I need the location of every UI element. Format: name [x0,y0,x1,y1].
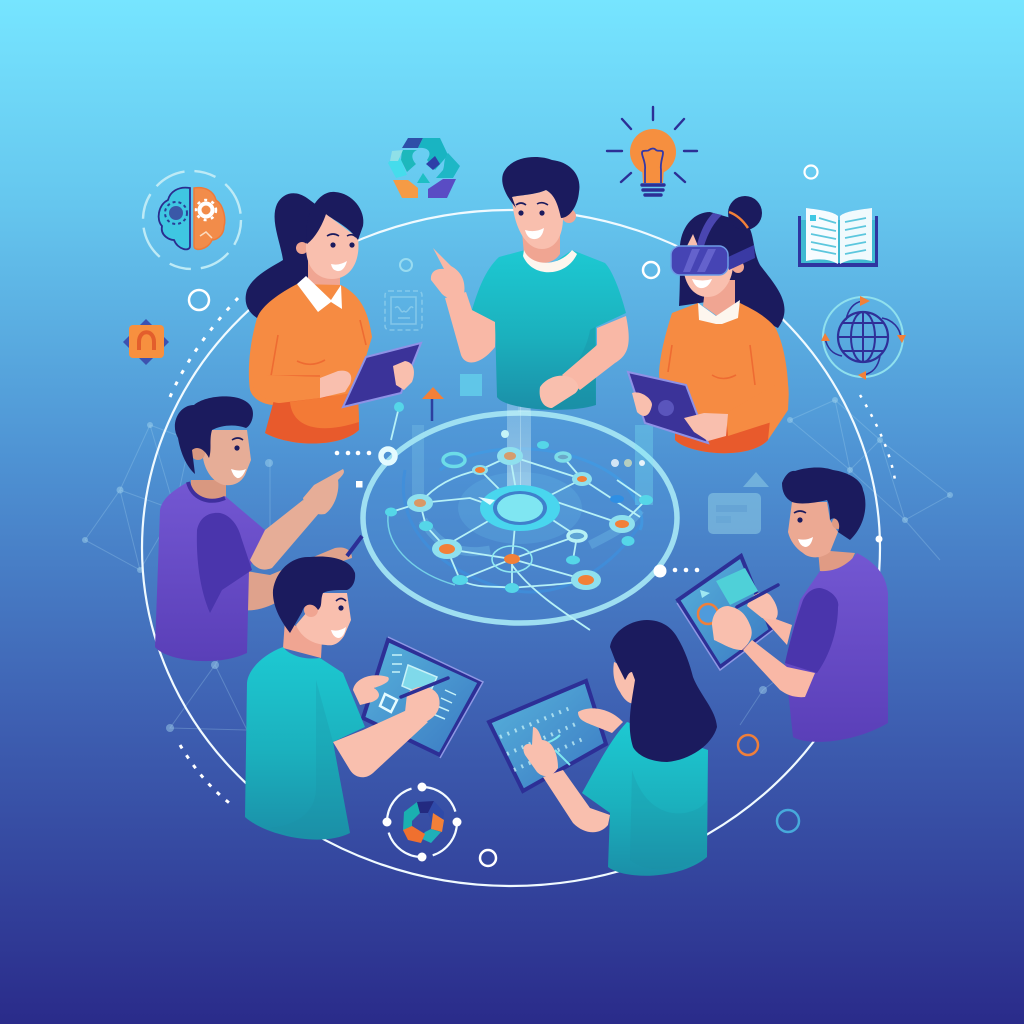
tablet [677,556,773,670]
tablet [489,681,606,791]
faint floating icons [385,259,769,534]
large orbit ring [142,210,895,886]
icon: lightbulb [607,107,697,195]
network links [391,407,646,630]
connector dots [335,449,699,578]
light beams [507,362,531,503]
central hub [478,485,560,531]
faint network right [740,397,953,725]
hologram nodes [385,402,653,593]
person: man pointing top centre [431,157,629,410]
tablet [363,637,483,758]
person: man with tablet bottom left [245,556,483,840]
icon: recycle hexagon [388,138,460,198]
faint network left [82,422,273,732]
hologram table [363,362,677,630]
small rings [189,166,818,866]
up arrow [422,387,444,421]
person: man with tablet right [677,468,888,742]
icon: orange diamond [123,319,169,365]
person: man pointing left [155,396,362,661]
icon: open book [798,208,878,267]
icon: cycle ring [382,782,462,862]
person: woman with tablet top left [246,192,421,444]
icon: globe [821,296,906,380]
icon: brain [143,171,241,269]
person: woman from behind with tablet [489,620,717,876]
person: woman with VR headset [628,196,789,453]
VR headset [671,213,755,275]
